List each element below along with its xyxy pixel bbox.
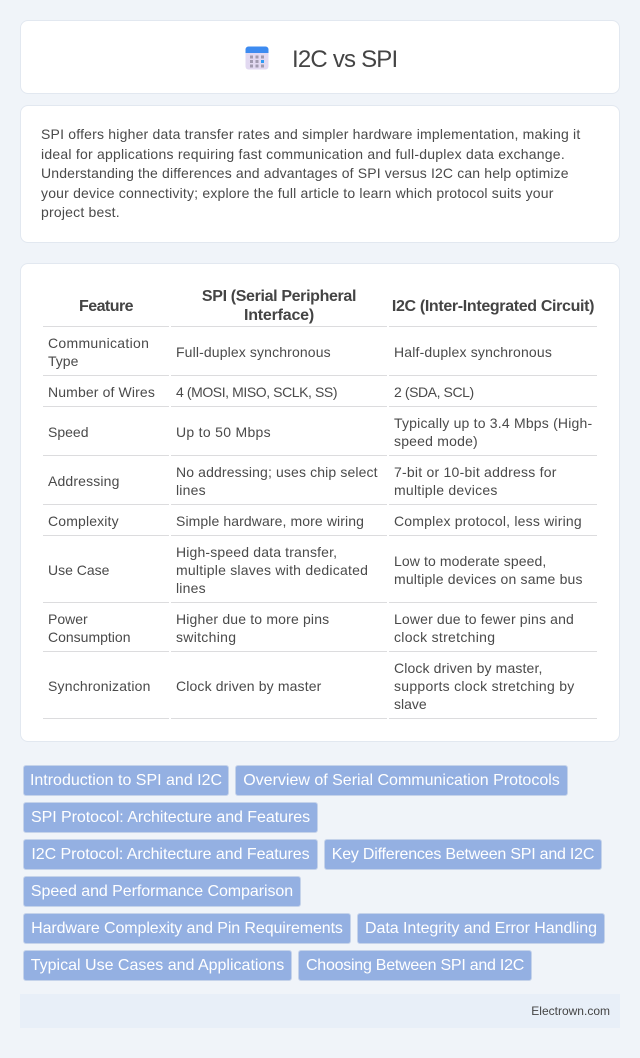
tag: Speed and Performance Comparison <box>31 883 293 900</box>
tag <box>23 950 292 981</box>
intro panel <box>20 105 620 243</box>
tag: Introduction to SPI and I2C <box>30 772 222 789</box>
tag: SPI Protocol: Architecture and Features <box>31 809 310 826</box>
row: addressing: 7-bit or 10-bit address for <box>394 464 557 480</box>
row: addressing: Addressing <box>48 473 120 489</box>
row: speed: Speed <box>48 424 88 440</box>
tag <box>23 913 351 944</box>
tag: Key Differences Between SPI and I2C <box>332 846 594 863</box>
intro text: your device connectivity; explore the full article to learn which protocol suits your <box>41 184 554 200</box>
row: power consumption: Higher due to more pins <box>176 611 329 627</box>
row: power consumption: Consumption <box>48 629 130 645</box>
row: communication type: Half-duplex synchronous <box>394 344 552 360</box>
tag: Overview of Serial Communication Protocols <box>243 772 560 789</box>
tag <box>324 839 602 870</box>
row: use case: Low to moderate speed, <box>394 553 546 569</box>
row: complexity <box>48 513 582 529</box>
row: synchronization: Clock driven by master, <box>394 660 542 676</box>
row: complexity: Simple hardware, more wiring <box>176 513 364 529</box>
panel: comparison table <box>20 263 620 742</box>
intro text: SPI offers higher data transfer rates and simpler hardware implementation, making it <box>41 126 580 142</box>
row: synchronization <box>48 660 575 712</box>
table header row: Interface) <box>244 307 314 324</box>
title: I2C vs SPI <box>292 46 397 73</box>
tag <box>23 765 229 796</box>
table header row <box>79 288 594 324</box>
row: complexity: Complex protocol, less wiring <box>394 513 582 529</box>
intro text <box>41 126 580 220</box>
row: power consumption: clock stretching <box>394 629 495 645</box>
intro text: project best. <box>41 204 120 220</box>
intro text: Understanding the differences and advantages of SPI versus I2C can help optimize <box>41 165 569 181</box>
tag <box>298 950 532 981</box>
row: synchronization: Synchronization <box>48 678 151 694</box>
row: use case: multiple devices on same bus <box>394 571 583 587</box>
tag: Hardware Complexity and Pin Requirements <box>31 920 343 937</box>
header panel <box>20 20 620 94</box>
row: addressing: lines <box>176 482 206 498</box>
row: addressing <box>48 464 557 498</box>
tag <box>357 913 605 944</box>
row: power consumption: Power <box>48 611 88 627</box>
row: power consumption: switching <box>176 629 236 645</box>
row: communication type: Type <box>48 353 78 369</box>
row: addressing: multiple devices <box>394 482 498 498</box>
tag: I2C Protocol: Architecture and Features <box>31 846 310 863</box>
row: communication type: Full-duplex synchronous <box>176 344 331 360</box>
row: number of wires: Number of Wires <box>48 384 155 400</box>
row: use case: multiple slaves with dedicated <box>176 562 368 578</box>
table header row: I2C (Inter-Integrated Circuit) <box>392 298 594 315</box>
row: power consumption: Lower due to fewer pins and <box>394 611 574 627</box>
row: speed <box>48 415 592 449</box>
row: use case <box>48 544 583 596</box>
tag <box>23 876 301 907</box>
icon: calendar <box>246 46 268 70</box>
row: synchronization: supports clock stretching by <box>394 678 575 694</box>
comparison table content <box>43 288 597 719</box>
row: communication type <box>48 335 552 369</box>
row: power consumption <box>48 611 574 645</box>
row: complexity: Complexity <box>48 513 119 529</box>
row: communication type: Communication <box>48 335 149 351</box>
tag: Data Integrity and Error Handling <box>365 920 597 937</box>
tag <box>23 839 318 870</box>
row: number of wires: 2 (SDA, SCL) <box>394 384 474 400</box>
table header row: SPI (Serial Peripheral <box>202 288 356 305</box>
footer <box>20 994 620 1028</box>
tag <box>235 765 568 796</box>
tag <box>23 802 318 833</box>
tag: Choosing Between SPI and I2C <box>306 957 524 974</box>
row: use case: High-speed data transfer, <box>176 544 337 560</box>
footer credit: Electrown.com <box>531 1004 610 1018</box>
row: speed: Typically up to 3.4 Mbps (High- <box>394 415 592 431</box>
row: synchronization: Clock driven by master <box>176 678 321 694</box>
row: use case: Use Case <box>48 562 109 578</box>
row: number of wires <box>48 384 474 400</box>
row: addressing: No addressing; uses chip select <box>176 464 378 480</box>
row: speed: speed mode) <box>394 433 478 449</box>
intro text: ideal for applications requiring fast communication and full-duplex data exchange. <box>41 146 565 162</box>
row: use case: lines <box>176 580 206 596</box>
table header row: Feature <box>79 298 133 315</box>
tag: Typical Use Cases and Applications <box>31 957 284 974</box>
row: number of wires: 4 (MOSI, MISO, SCLK, SS) <box>176 384 337 400</box>
row: synchronization: slave <box>394 696 427 712</box>
row: speed: Up to 50 Mbps <box>176 424 271 440</box>
